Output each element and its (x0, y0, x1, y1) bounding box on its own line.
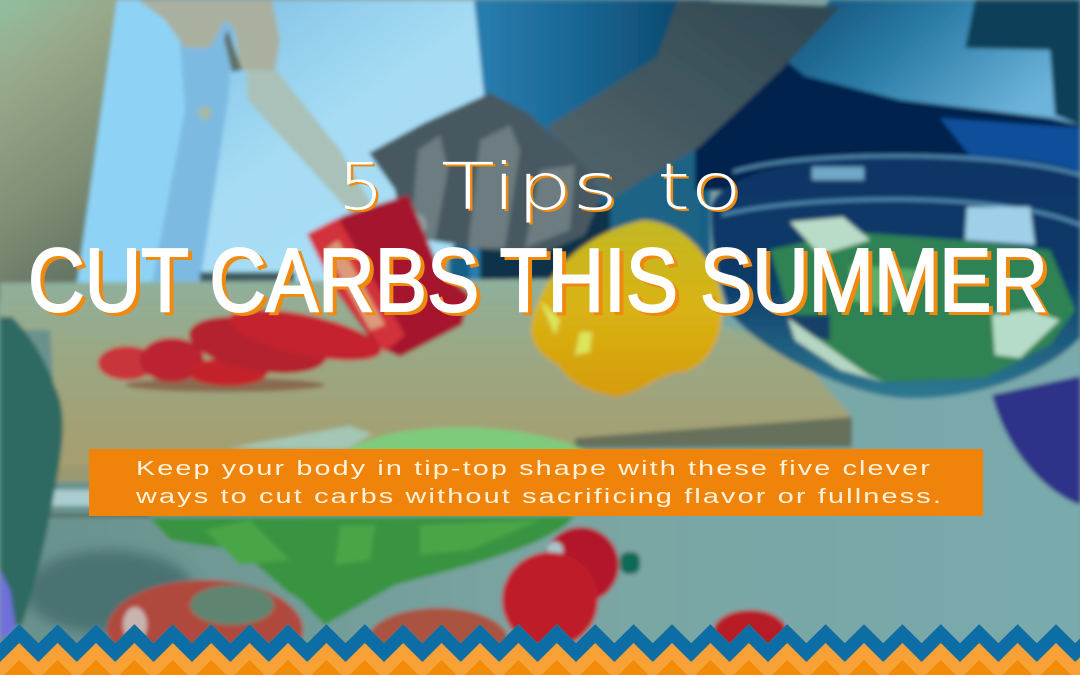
title (28, 151, 1052, 334)
cook's torso (76, 0, 710, 290)
title line 1: 5 Tips to: 5 (338, 151, 384, 225)
title line 1: 5 Tips to: 5 (340, 153, 386, 227)
red pepper and slices (98, 195, 470, 392)
cutting board and table (0, 279, 1080, 675)
glass salad bowl (712, 155, 1080, 398)
intro text: ways to cut carbs without sacrificing flavor or fullness. (135, 486, 943, 508)
lettuce in foreground (150, 426, 585, 625)
leafy vegetable, left edge (0, 317, 63, 640)
zigzag footer border (0, 624, 1080, 675)
title line 1: 5 Tips to (338, 151, 744, 227)
title line 1: 5 Tips to: to (657, 151, 742, 225)
band background (89, 449, 983, 516)
knife (246, 70, 400, 253)
tomatoes (107, 527, 787, 675)
title line 1: 5 Tips to: Tips (444, 153, 620, 227)
pepper slices (98, 299, 385, 392)
right side shirt, jeans and dark background (695, 0, 1080, 190)
title line 1: 5 Tips to: to (660, 153, 744, 227)
yellow pepper (531, 220, 723, 397)
tomatoes near lettuce (502, 527, 787, 654)
salad in bowl (770, 167, 1075, 382)
intro text: Keep your body in tip-top shape with these five clever (136, 458, 932, 480)
wall background (0, 0, 140, 300)
purple cabbage, right edge (992, 376, 1080, 505)
intro text (135, 458, 943, 508)
arm and hand (138, 0, 840, 255)
callout: orange intro band (89, 449, 983, 516)
title line 1: 5 Tips to: Tips (441, 151, 618, 225)
